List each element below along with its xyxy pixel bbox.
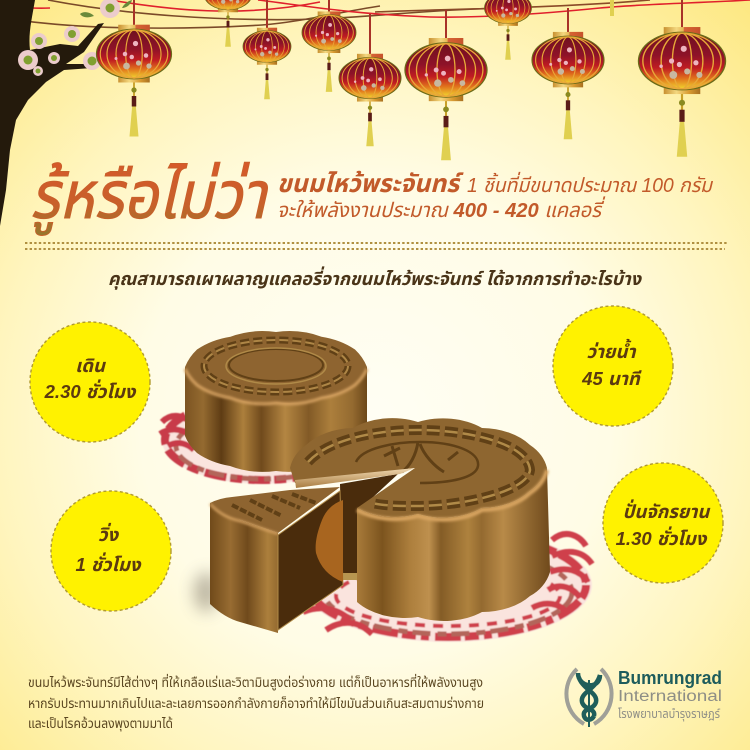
logo wordmark: Bumrungrad: [618, 668, 722, 688]
back cake side: [185, 367, 367, 472]
paper doily: front: [303, 528, 592, 642]
back cake embossing: [204, 340, 348, 392]
walking text: [44, 355, 137, 402]
hanging strings: [0, 0, 750, 60]
subheading line 1 emphasis: ขนมไหว้พระจันทร์: [277, 170, 464, 198]
note line 3: และเป็นโรคอ้วนลงพุงตามมาได้: [28, 716, 173, 731]
logo thai name: โรงพยาบาลบำรุงราษฎร์: [618, 707, 721, 721]
swimming text: [581, 338, 643, 389]
slice side: [210, 503, 278, 633]
running text: [76, 522, 142, 575]
lantern 9: [204, 0, 252, 47]
mooncake: back whole: [185, 331, 367, 472]
slice rim highlight: [210, 504, 278, 534]
logo emblem: [566, 669, 612, 727]
lantern 4: [339, 54, 401, 146]
cycling text: [616, 499, 711, 549]
logo: Bumrungrad International: [566, 668, 722, 727]
paper doily: back: [160, 396, 362, 484]
lantern 8: [638, 27, 726, 157]
slice embossing: [232, 494, 316, 520]
lantern 1: [96, 25, 172, 136]
tree trunk and branch: [0, 0, 104, 226]
logo international: International: [618, 688, 722, 705]
dotted divider: [25, 243, 727, 249]
note line 1: ขนมไหว้พระจันทร์มีไส้ต่างๆ ที่ให้เกลือแร่และวิตามินสูงต่อร่างกาย แต่ก็เป็นอาหารที่ให้พลังงานสูง: [28, 673, 483, 690]
lantern 5: [405, 38, 487, 160]
cake interior: [340, 474, 398, 575]
blossoms: [18, 0, 132, 76]
yellow circle: [553, 306, 673, 426]
cake side: [357, 468, 550, 621]
rim highlight: [357, 470, 547, 520]
running text: วิ่ง: [98, 522, 119, 545]
slice face: [278, 491, 343, 630]
mooncake: front cut: [290, 418, 550, 621]
callout: cycling: [603, 463, 723, 583]
cut edge strip: [295, 468, 415, 488]
cycling text: 1.30 ชั่วโมง: [616, 526, 708, 549]
swimming text: ว่ายน้ำ: [586, 338, 636, 362]
lanterns: [96, 0, 726, 160]
back cake top: [185, 331, 367, 403]
cake top: [290, 418, 547, 518]
lantern 7: [532, 32, 604, 139]
walking text: 2.30 ชั่วโมง: [44, 379, 137, 402]
running text: 1 ชั่วโมง: [76, 552, 142, 575]
lantern 2: [243, 28, 291, 99]
walking text: เดิน: [75, 355, 107, 376]
back cake rim highlight: [185, 369, 367, 404]
filling: [316, 500, 343, 582]
lantern 6: [484, 0, 532, 60]
yellow circle: [30, 322, 150, 442]
mooncake: cut slice: [194, 487, 343, 633]
note line 2: หากรับประทานมากเกินไปและละเลยการออกกำลังกายก็อาจทำให้มีไขมันส่วนเกินสะสมตามร่างกาย: [28, 696, 484, 711]
title: รู้หรือไม่ว่า: [30, 158, 269, 236]
yellow circle: [51, 491, 171, 611]
slice shadow: [194, 572, 218, 612]
callout: running: [51, 491, 171, 611]
swimming text: 45 นาที: [581, 368, 643, 389]
footer note: [28, 673, 484, 731]
slice top: [210, 487, 340, 533]
callout: walking: [30, 322, 150, 442]
cycling text: ปั่นจักรยาน: [623, 499, 711, 522]
tree branch with blossoms: [0, 0, 132, 226]
yellow circle: [603, 463, 723, 583]
lantern 3: [302, 11, 356, 92]
callout: swimming: [553, 306, 673, 426]
cake embossing: [308, 430, 530, 506]
subheading line 1 rest: 1 ชิ้นที่มีขนาดประมาณ 100 กรัม: [467, 171, 714, 197]
question line: คุณสามารถเผาผลาญแคลอรี่จากขนมไหว้พระจันทร์ ได้จากการทำอะไรบ้าง: [108, 266, 643, 290]
subheading line 2: จะให้พลังงานประมาณ 400 - 420 แคลอรี่: [277, 196, 606, 222]
subheading: [277, 170, 714, 222]
